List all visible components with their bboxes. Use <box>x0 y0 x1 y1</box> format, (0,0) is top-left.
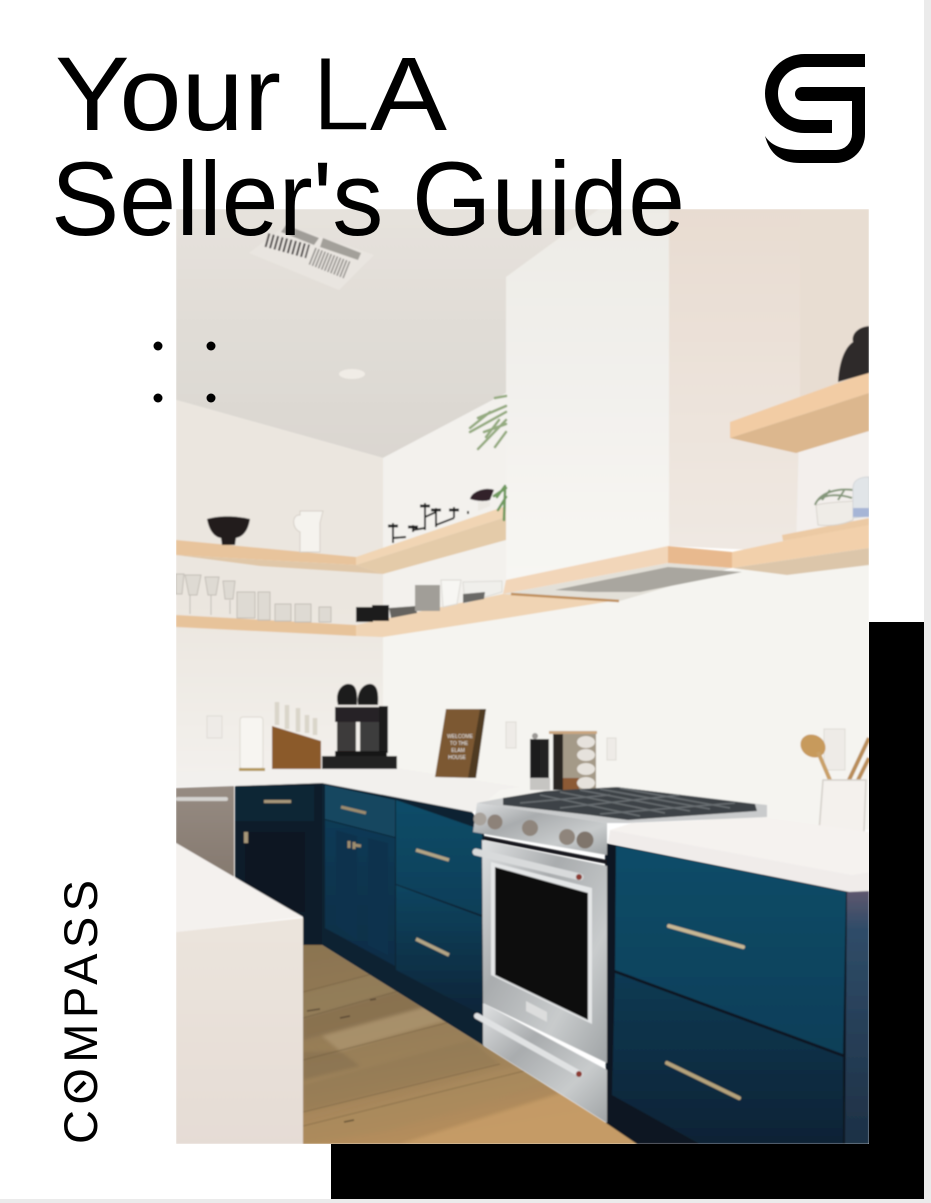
hood front <box>506 209 669 580</box>
right page margin <box>924 0 931 1203</box>
ceiling <box>176 209 620 458</box>
outlets <box>207 716 845 770</box>
paper towel <box>239 717 265 771</box>
vase <box>838 326 869 382</box>
island counter <box>176 843 303 1144</box>
black mugs <box>356 605 389 622</box>
title: L <box>312 36 370 153</box>
hood wood band <box>503 546 668 594</box>
blue drawers <box>396 800 482 1015</box>
black backing shape <box>331 622 924 1199</box>
plant leaves <box>470 396 506 520</box>
letter board: ELAM <box>451 748 465 754</box>
letter board: WELCOME <box>447 734 474 740</box>
utensil crock <box>819 780 866 835</box>
white pitcher <box>294 511 323 552</box>
oven <box>476 840 607 1063</box>
black bowl <box>207 516 250 545</box>
kitchen photograph <box>176 209 869 1145</box>
right cabinet side panel <box>845 891 869 1144</box>
right wall <box>382 398 506 618</box>
far right wall <box>800 209 869 397</box>
lower drawer handle <box>667 1063 739 1098</box>
right cabinet lower drawer <box>612 973 843 1144</box>
wall below shelves <box>680 566 869 830</box>
knife block <box>272 702 321 769</box>
range control panel <box>473 803 607 864</box>
upper right shelf <box>730 372 869 438</box>
compass wordmark: COMPASS <box>54 880 107 1144</box>
cooktop <box>477 787 767 823</box>
spice rack <box>549 731 597 790</box>
title: A <box>370 36 447 153</box>
hood underside <box>503 563 732 601</box>
title <box>51 36 685 258</box>
right cabinet backing <box>605 843 850 1144</box>
back counter <box>176 768 520 813</box>
letter board: TO THE <box>450 741 469 747</box>
hood side <box>669 209 800 552</box>
blue door cabinet <box>325 785 395 966</box>
wooden utensils <box>796 730 869 780</box>
dark corner cabinet <box>235 783 323 945</box>
storage drawer <box>477 1003 607 1123</box>
bottom page margin <box>0 1199 931 1203</box>
lower right shelf <box>732 523 869 568</box>
purple pot <box>470 489 494 511</box>
title: Your <box>55 36 281 153</box>
ceiling light <box>339 369 365 379</box>
dishwasher <box>176 786 234 877</box>
wood floor <box>303 945 643 1145</box>
air vent <box>264 225 361 278</box>
candle holder <box>388 503 468 543</box>
logo <box>765 60 865 163</box>
right cabinet upper drawer <box>615 846 846 1054</box>
glassware <box>176 574 331 622</box>
pepper mills <box>530 733 550 790</box>
left cabinet backing <box>322 783 484 1046</box>
lower left shelf <box>176 615 356 636</box>
title: Seller's Guide <box>51 141 685 258</box>
left wall <box>176 400 383 775</box>
letter board: HOUSE <box>448 755 467 761</box>
coffee maker <box>322 684 397 769</box>
glass jar <box>853 477 869 518</box>
upper left shelf <box>176 540 356 565</box>
upper drawer handle <box>669 926 743 947</box>
four dots <box>154 342 216 402</box>
letter board <box>435 709 486 778</box>
stacked plates <box>389 580 502 618</box>
potted plant <box>815 489 853 525</box>
right counter <box>608 818 869 892</box>
